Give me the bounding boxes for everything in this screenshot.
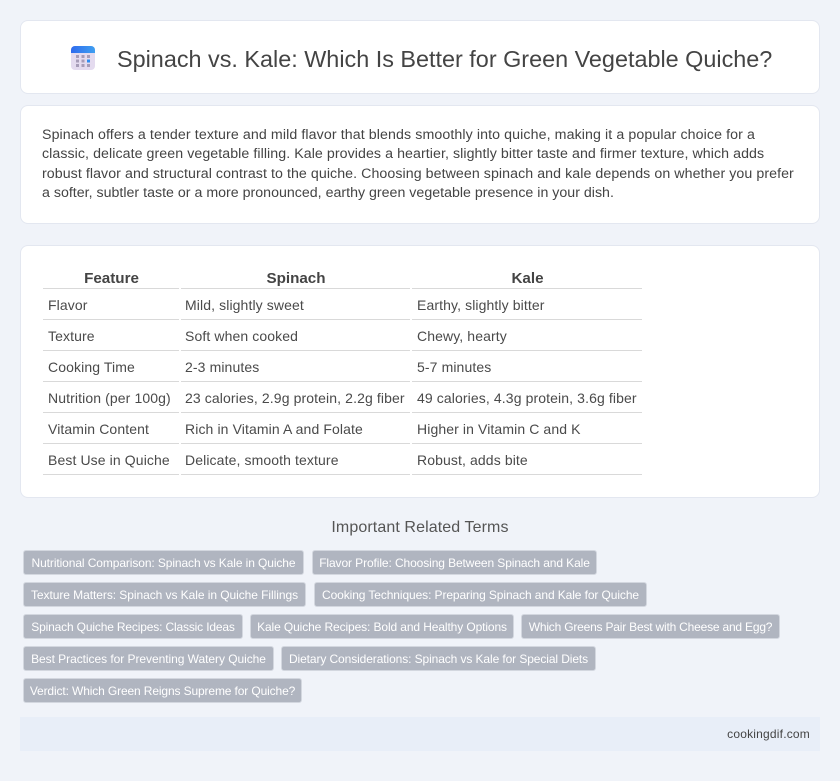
row: texture: Soft when cooked [185, 328, 298, 344]
row: nutrition: Nutrition (per 100g) [48, 390, 171, 406]
tag [23, 678, 302, 703]
footer [20, 717, 820, 751]
tag [312, 550, 597, 575]
title: Spinach vs. Kale: Which Is Better for Green Vegetable Quiche? [117, 46, 772, 72]
row: best use: Delicate, smooth texture [185, 452, 339, 468]
tag: Spinach Quiche Recipes: Classic Ideas [31, 620, 235, 634]
table header: Spinach [266, 270, 326, 287]
heading: related terms: Important Related Terms [331, 519, 509, 536]
table header [84, 270, 544, 287]
row: cooking time [48, 359, 491, 375]
tag [281, 646, 596, 671]
panel: header [20, 20, 820, 94]
row: nutrition: 23 calories, 2.9g protein, 2.2g fiber [185, 390, 405, 406]
tag [23, 550, 304, 575]
intro text: Spinach offers a tender texture and mild flavor that blends smoothly into quiche, making it a popular choice for a [42, 127, 755, 143]
row: nutrition: 49 calories, 4.3g protein, 3.6g fiber [417, 390, 637, 406]
table header: Feature [84, 270, 139, 287]
row: flavor [48, 297, 545, 313]
tag [521, 614, 780, 639]
row: flavor: Flavor [48, 297, 88, 313]
tag: Dietary Considerations: Spinach vs Kale for Special Diets [289, 652, 588, 666]
table header: Kale [511, 270, 544, 287]
tag: Kale Quiche Recipes: Bold and Healthy Options [257, 620, 507, 634]
tag list [23, 550, 780, 703]
tag [23, 582, 306, 607]
tag: Which Greens Pair Best with Cheese and Egg? [529, 620, 772, 634]
row: vitamin content: Vitamin Content [48, 421, 149, 437]
panel: intro [20, 105, 820, 224]
tag: Best Practices for Preventing Watery Quiche [31, 652, 266, 666]
tag: Verdict: Which Green Reigns Supreme for Quiche? [30, 684, 295, 698]
footer source: cookingdif.com [727, 727, 810, 741]
row: texture [48, 328, 507, 344]
row: vitamin content [48, 421, 581, 437]
intro text: a softer, subtler taste or a more pronounced, earthy green vegetable presence in your dish. [42, 185, 614, 201]
row: texture: Chewy, hearty [417, 328, 507, 344]
tag [23, 614, 243, 639]
tag: Texture Matters: Spinach vs Kale in Quiche Fillings [31, 588, 298, 602]
row: texture: Texture [48, 328, 95, 344]
intro text: robust flavor and structural contrast to the quiche. Choosing between spinach and kale depends on whether you prefer [42, 166, 794, 182]
row: vitamin content: Rich in Vitamin A and Folate [185, 421, 363, 437]
row: cooking time: 2-3 minutes [185, 359, 259, 375]
icon: calendar [71, 46, 95, 70]
row: best use: Robust, adds bite [417, 452, 528, 468]
row: cooking time: Cooking Time [48, 359, 135, 375]
tag [250, 614, 514, 639]
row: flavor: Earthy, slightly bitter [417, 297, 545, 313]
tag: Cooking Techniques: Preparing Spinach and Kale for Quiche [322, 588, 639, 602]
row: nutrition [48, 390, 637, 406]
tag [23, 646, 274, 671]
row: flavor: Mild, slightly sweet [185, 297, 304, 313]
row: vitamin content: Higher in Vitamin C and K [417, 421, 581, 437]
tag: Nutritional Comparison: Spinach vs Kale in Quiche [32, 556, 295, 570]
tag [314, 582, 647, 607]
tag: Flavor Profile: Choosing Between Spinach and Kale [319, 556, 590, 570]
row: cooking time: 5-7 minutes [417, 359, 491, 375]
row: best use [48, 452, 528, 468]
row: best use: Best Use in Quiche [48, 452, 170, 468]
panel: comparison table [20, 245, 820, 498]
intro text [42, 127, 794, 201]
intro text: classic, delicate green vegetable filling. Kale provides a heartier, slightly bitter taste and firmer texture, which adds [42, 146, 764, 162]
